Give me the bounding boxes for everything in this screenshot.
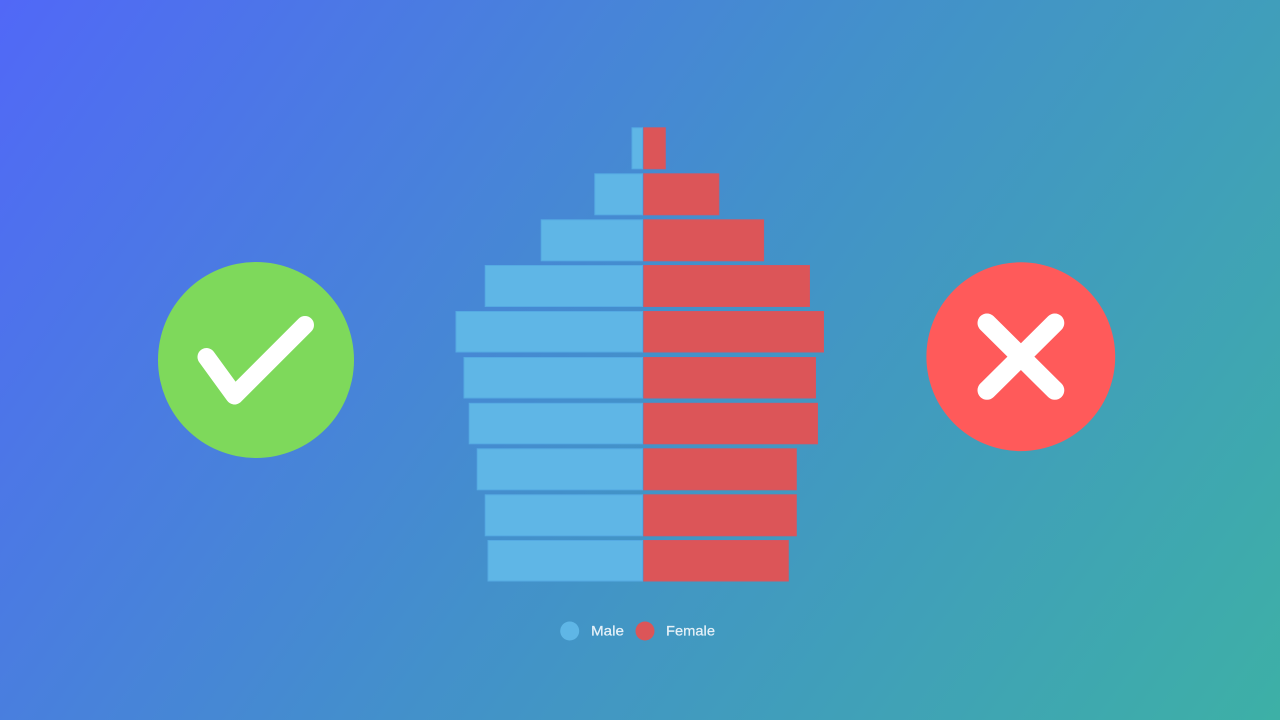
male bars [456,128,642,581]
legend [560,622,715,640]
legend: male [560,622,624,640]
icon: green check mark [158,262,354,458]
legend: female: Female [666,622,715,638]
female bars [644,128,824,581]
legend: female [636,622,715,640]
legend: male: Male [591,622,624,638]
population pyramid chart [456,128,824,581]
icon: red cross [926,262,1115,451]
